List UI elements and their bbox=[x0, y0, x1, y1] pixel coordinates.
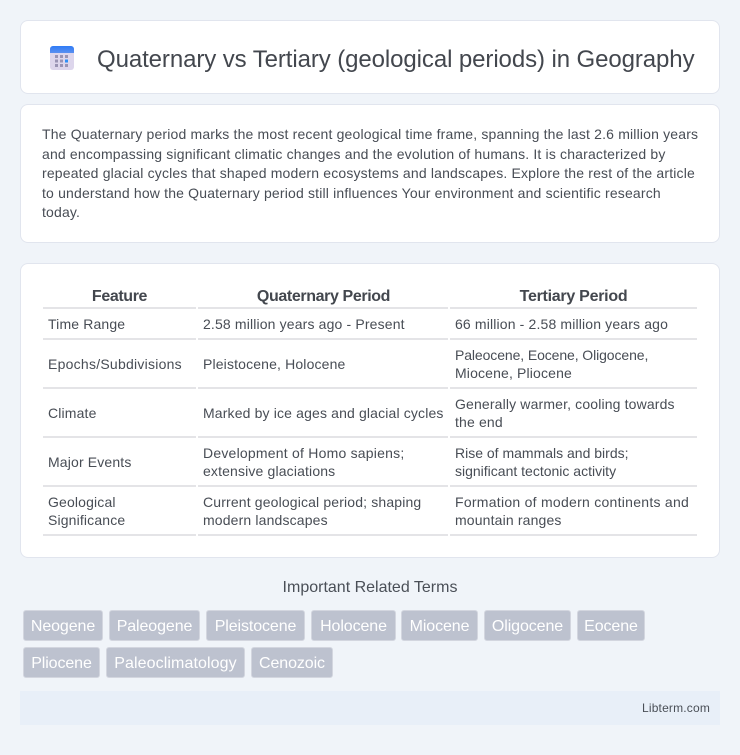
header card bbox=[20, 20, 720, 94]
row: time range: Time Range bbox=[48, 316, 125, 332]
row: time range bbox=[48, 316, 668, 332]
row: climate: Marked by ice ages and glacial cycles bbox=[203, 405, 444, 421]
intro text: repeated glacial cycles that shaped modern ecosystems and landscapes. Explore the rest of the article bbox=[42, 165, 695, 181]
row: major events: Rise of mammals and birds; bbox=[455, 445, 629, 461]
tag: Eocene bbox=[577, 610, 645, 641]
row: geological significance: Significance bbox=[48, 512, 125, 528]
table header: Quaternary Period bbox=[257, 288, 390, 305]
tag: Paleogene: Paleogene bbox=[117, 618, 192, 635]
row: geological significance: mountain ranges bbox=[455, 512, 562, 528]
icon: calendar bbox=[50, 46, 74, 70]
title: Quaternary vs Tertiary (geological periods) in Geography bbox=[97, 46, 694, 73]
related term tags bbox=[23, 610, 645, 678]
row: time range: 66 million - 2.58 million years ago bbox=[455, 316, 668, 332]
tag: Paleogene bbox=[109, 610, 200, 641]
footer bar bbox=[20, 691, 720, 725]
row: time range: 2.58 million years ago - Present bbox=[203, 316, 405, 332]
row: geological significance bbox=[48, 494, 689, 528]
intro card bbox=[20, 104, 720, 243]
row: major events: Development of Homo sapiens; bbox=[203, 445, 404, 461]
tag: Eocene: Eocene bbox=[584, 618, 638, 635]
tag: Paleoclimatology: Paleoclimatology bbox=[114, 655, 237, 672]
row: geological significance: Formation of modern continents and bbox=[455, 494, 689, 510]
row: epochs bbox=[48, 347, 648, 381]
tag: Holocene bbox=[311, 610, 396, 641]
intro text bbox=[42, 126, 698, 220]
row: climate: Generally warmer, cooling towards bbox=[455, 396, 675, 412]
row: climate bbox=[48, 396, 675, 430]
tag: Neogene bbox=[23, 610, 103, 641]
row: climate: Climate bbox=[48, 405, 97, 421]
tag: Pleistocene bbox=[206, 610, 305, 641]
table header bbox=[92, 288, 627, 305]
tag: Paleoclimatology bbox=[106, 647, 245, 678]
row: climate: the end bbox=[455, 414, 503, 430]
tag: Oligocene bbox=[484, 610, 571, 641]
row: major events: extensive glaciations bbox=[203, 463, 335, 479]
row: geological significance: Current geological period; shaping bbox=[203, 494, 421, 510]
row: epochs: Paleocene, Eocene, Oligocene, bbox=[455, 347, 648, 363]
intro text: today. bbox=[42, 204, 80, 220]
comparison table bbox=[43, 288, 697, 536]
tag: Cenozoic: Cenozoic bbox=[259, 655, 325, 672]
row: major events: significant tectonic activity bbox=[455, 463, 616, 479]
tag: Holocene: Holocene bbox=[320, 618, 387, 635]
row: epochs: Epochs/Subdivisions bbox=[48, 356, 182, 372]
row: epochs: Pleistocene, Holocene bbox=[203, 356, 345, 372]
tag: Pliocene: Pliocene bbox=[31, 655, 92, 672]
related terms heading: Important Related Terms bbox=[283, 579, 457, 596]
row: major events: Major Events bbox=[48, 454, 132, 470]
footer credit: Libterm.com bbox=[642, 701, 710, 715]
intro text: and encompassing significant climatic changes and the evolution of humans. It is characterized by bbox=[42, 146, 666, 162]
table card bbox=[20, 263, 720, 558]
row: epochs: Miocene, Pliocene bbox=[455, 365, 572, 381]
tag: Miocene: Miocene bbox=[410, 618, 469, 635]
tag: Neogene: Neogene bbox=[31, 618, 95, 635]
tag: Pliocene bbox=[23, 647, 100, 678]
row: geological significance: modern landscapes bbox=[203, 512, 328, 528]
tag: Pleistocene: Pleistocene bbox=[215, 618, 296, 635]
tag: Miocene bbox=[401, 610, 478, 641]
row: geological significance: Geological bbox=[48, 494, 116, 510]
intro text: to understand how the Quaternary period still influences Your environment and scientific research bbox=[42, 185, 661, 201]
table header: Feature bbox=[92, 288, 147, 305]
tag: Cenozoic bbox=[251, 647, 333, 678]
intro text: The Quaternary period marks the most recent geological time frame, spanning the last 2.6 million years bbox=[42, 126, 698, 142]
tag: Oligocene: Oligocene bbox=[492, 618, 563, 635]
row: major events bbox=[48, 445, 629, 479]
table header: Tertiary Period bbox=[520, 288, 627, 305]
